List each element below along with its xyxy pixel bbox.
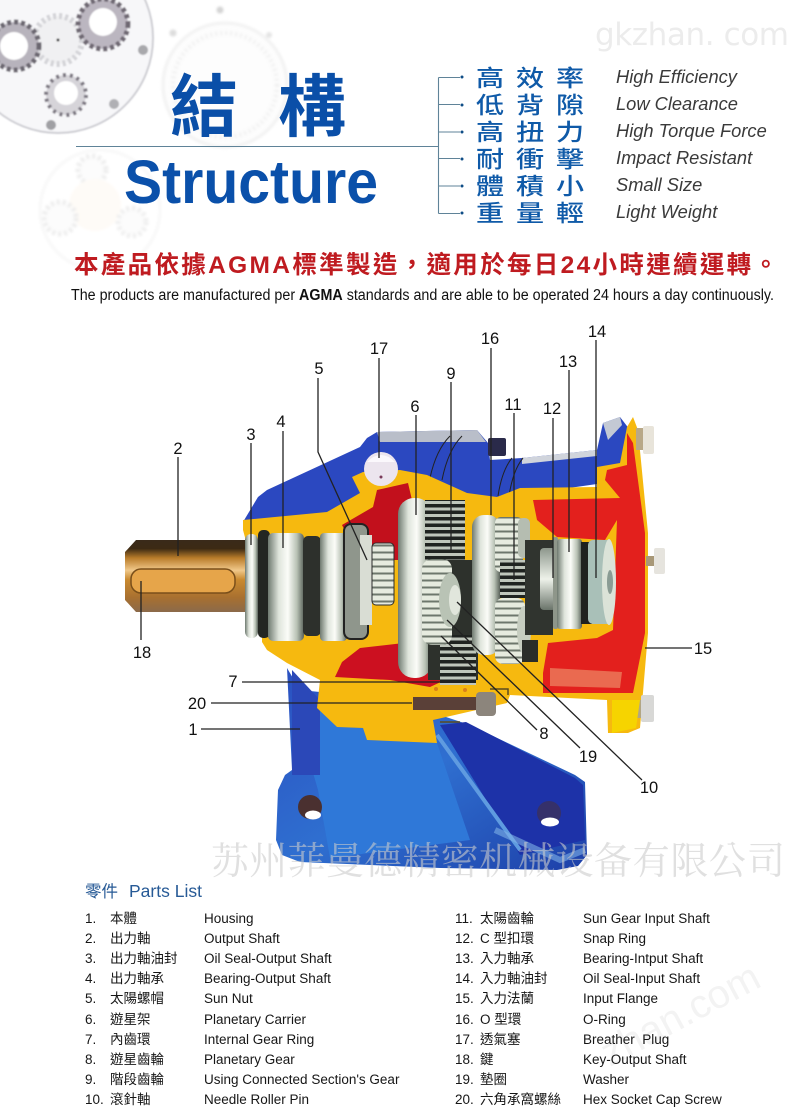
parts list heading: Parts List (129, 881, 202, 901)
parts list left column: 1. (85, 911, 96, 926)
second carrier (472, 515, 500, 655)
parts list left column: 滾針軸 (110, 1092, 150, 1107)
features list: Small Size (616, 174, 702, 195)
watermark: company name: 苏州菲曼德精密机械设备有限公司 (211, 830, 785, 885)
parts list left column: Housing (204, 911, 254, 926)
part number callouts: 17 (370, 340, 388, 358)
part number callouts: 18 (133, 644, 151, 662)
features list: 高扭力 (476, 119, 584, 145)
leader lines (141, 340, 692, 780)
title: Chinese: 結 (170, 70, 238, 146)
parts list right column: Snap Ring (583, 931, 646, 946)
part number callouts: 3 (246, 426, 256, 444)
parts list right column: 太陽齒輪 (480, 910, 534, 926)
part number callouts: 10 (640, 779, 658, 797)
part number callouts: 12 (543, 400, 561, 418)
parts list left column: 4. (85, 971, 96, 986)
base housing (276, 668, 587, 870)
features list: 耐衝擊 (476, 146, 584, 172)
parts list left column: Using Connected Section's Gear (204, 1072, 400, 1087)
parts list right column: 11. (455, 911, 473, 926)
bolt: housing top (488, 438, 506, 456)
part number callouts: 7 (228, 673, 238, 691)
parts list right column: 18. (455, 1052, 474, 1067)
features list: 體積小 (476, 173, 584, 199)
parts list right column: Key-Output Shaft (583, 1052, 687, 1067)
statement: English: The products are manufactured per AGMA standards and are able to be operated 24 hours a day continuously. (71, 287, 774, 304)
part number callouts: 14 (588, 323, 606, 341)
top blue housing (243, 417, 630, 530)
parts list right column: 20. (455, 1092, 474, 1107)
stepped gear (425, 500, 478, 685)
parts list left column: Planetary Gear (204, 1052, 295, 1067)
output shaft (125, 540, 246, 612)
gearbox cutaway illustration (125, 417, 665, 870)
parts list left column: 出力軸油封 (110, 951, 178, 966)
parts list right column: O 型環 (480, 1012, 522, 1027)
parts list left column: 5. (85, 991, 96, 1006)
red section left top (342, 483, 412, 560)
features list: High Efficiency (616, 66, 739, 87)
features list: Low Clearance (616, 93, 738, 114)
parts list right column: 入力軸承 (480, 951, 534, 966)
parts list right column: 17. (455, 1032, 474, 1047)
parts list right column: 12. (455, 931, 474, 946)
red section left bottom (335, 640, 445, 687)
part number callouts: 4 (276, 413, 286, 431)
parts list left column: 階段齒輪 (110, 1071, 164, 1087)
parts list right column: Oil Seal-Input Shaft (583, 971, 700, 986)
title: Chinese: 構 (278, 70, 346, 146)
parts list left column: 遊星架 (110, 1012, 150, 1027)
parts list heading: 零件 (85, 883, 118, 901)
parts list left column: 2. (85, 931, 96, 946)
part number callouts: 20 (188, 695, 206, 713)
parts list right column: Bearing-Intput Shaft (583, 951, 703, 966)
part number callouts: 19 (579, 748, 597, 766)
parts list right column: 19. (455, 1072, 474, 1087)
parts list left column: 出力軸承 (110, 971, 164, 986)
features list (476, 65, 767, 226)
part number callouts: 8 (539, 725, 549, 743)
second stage gears (495, 517, 556, 664)
output bearings (245, 524, 394, 641)
parts list right column: 六角承窩螺絲 (480, 1092, 561, 1107)
planetary carrier (398, 498, 432, 678)
statement: Chinese: 本產品依據AGMA標準製造，適用於每日24小時連續運轉。 (74, 250, 778, 279)
parts list left column: Needle Roller Pin (204, 1092, 309, 1107)
part number callouts: 5 (314, 360, 324, 378)
parts list left column: 9. (85, 1072, 96, 1087)
parts list left column: 出力軸 (110, 931, 150, 946)
part number callouts: 15 (694, 640, 712, 658)
part number callouts: 2 (173, 440, 183, 458)
parts list right column: Sun Gear Input Shaft (583, 911, 710, 926)
parts list left column: Internal Gear Ring (204, 1032, 314, 1047)
features list: 低背隙 (476, 92, 584, 118)
parts list right column: 入力法蘭 (480, 991, 534, 1006)
parts list right column: 15. (455, 991, 474, 1006)
red input flange (533, 433, 645, 693)
part number callouts: 16 (481, 330, 499, 348)
parts list left column: 遊星齒輪 (110, 1051, 164, 1067)
parts list right column: 13. (455, 951, 474, 966)
parts list left column: Sun Nut (204, 991, 253, 1006)
parts list left column: Planetary Carrier (204, 1012, 307, 1027)
bright yellow flange foot (612, 700, 640, 733)
yellow section (243, 417, 648, 743)
parts list left column: Oil Seal-Output Shaft (204, 951, 332, 966)
parts list right column: O-Ring (583, 1012, 626, 1027)
part number callouts: 6 (410, 398, 420, 416)
features list: 重量輕 (476, 200, 584, 226)
features list: High Torque Force (616, 120, 767, 141)
parts list left column: 太陽螺帽 (110, 991, 164, 1006)
features list: Impact Resistant (616, 147, 753, 168)
parts list left column: 本體 (110, 911, 137, 926)
parts list right column: 14. (455, 971, 474, 986)
parts list right column: 墊圈 (480, 1072, 507, 1087)
planet gear front (422, 559, 461, 645)
part number callouts: 1 (188, 721, 198, 739)
hex socket screw (413, 689, 508, 722)
parts list left column: 3. (85, 951, 96, 966)
parts list right column: Breather Plug (583, 1032, 669, 1047)
parts list left column: Output Shaft (204, 931, 280, 946)
watermark: diagonal: zhan.com (594, 955, 767, 1075)
features list: 高效率 (476, 65, 584, 91)
parts list left column: 7. (85, 1032, 96, 1047)
watermark: gkzhan.com: gkzhan. com (595, 17, 789, 53)
part number callouts (133, 323, 712, 797)
parts list right column: 入力軸油封 (480, 971, 548, 986)
parts list left column: 8. (85, 1052, 96, 1067)
parts list right column: 透氣塞 (480, 1031, 521, 1047)
decorative gear photo background (0, 0, 287, 270)
part number callouts: 11 (504, 396, 522, 414)
flange bolts (634, 426, 665, 722)
parts list right column: Washer (583, 1072, 630, 1087)
breather plug (364, 452, 398, 486)
parts list right column: Hex Socket Cap Screw (583, 1092, 722, 1107)
part number callouts: 13 (559, 353, 577, 371)
parts list right column (455, 910, 722, 1107)
input bearing and seal (553, 537, 616, 629)
parts list right column: 鍵 (480, 1052, 494, 1067)
parts list left column: 內齒環 (110, 1032, 151, 1047)
part number callouts: 9 (446, 365, 456, 383)
features bracket (76, 76, 464, 214)
features list: Light Weight (616, 201, 718, 222)
parts list left column: Bearing-Output Shaft (204, 971, 331, 986)
parts list right column: C 型扣環 (480, 931, 534, 946)
parts list left column (85, 911, 400, 1107)
title: English: Structure (124, 148, 378, 216)
parts list left column: 10. (85, 1092, 104, 1107)
parts list right column: Input Flange (583, 991, 658, 1006)
parts list right column: 16. (455, 1012, 474, 1027)
parts list left column: 6. (85, 1012, 96, 1027)
